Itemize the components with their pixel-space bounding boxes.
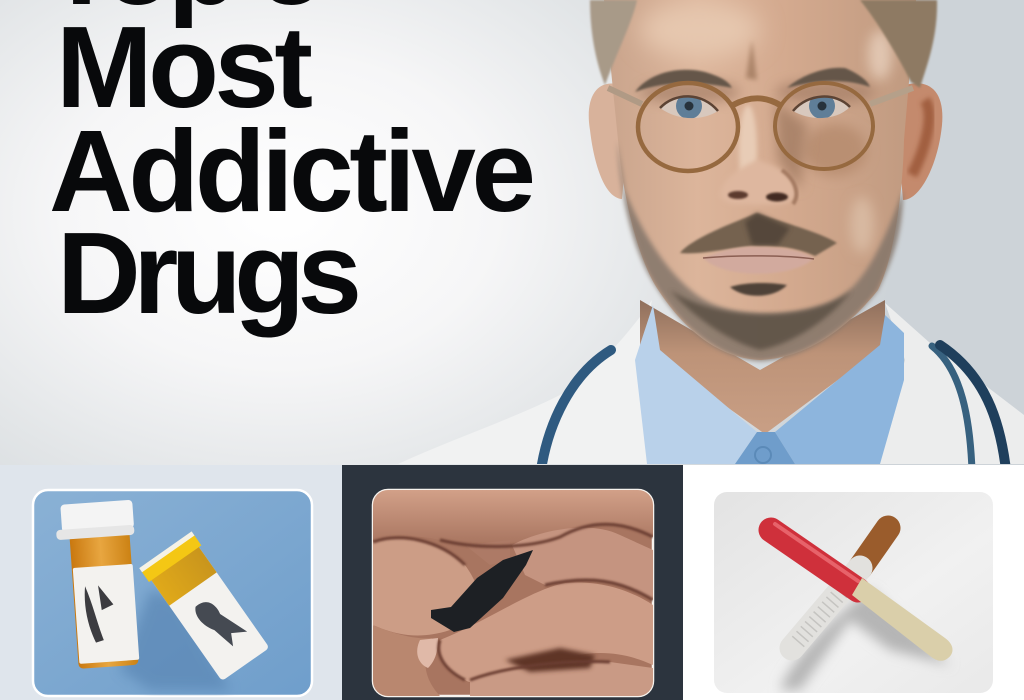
ear right (897, 83, 942, 200)
ear left (588, 84, 624, 199)
title (46, 0, 536, 338)
eyebrows (635, 68, 870, 92)
nose (720, 160, 797, 205)
face (604, 0, 916, 360)
hair (590, 0, 937, 88)
title: Most (56, 2, 313, 132)
neck (640, 300, 885, 434)
icon: cigarette (792, 528, 888, 648)
facial shading (640, 2, 892, 253)
lab coat (398, 300, 1024, 464)
photo card (714, 492, 993, 693)
panel: red stick and cigarette (714, 492, 993, 693)
doctor portrait (398, 0, 1024, 470)
icon: red and beige capsule (771, 524, 952, 661)
panel: prescription bottles (0, 465, 342, 700)
fingers (373, 490, 653, 696)
mouth (703, 247, 814, 274)
stethoscope (541, 345, 1006, 470)
hero background (0, 0, 1024, 465)
panel: hands with black patch (342, 465, 683, 700)
title: Addictive (49, 106, 536, 236)
shirt collar (635, 305, 904, 464)
glasses (608, 83, 913, 171)
photo card (373, 490, 653, 696)
beard (617, 140, 903, 361)
icon: yellow bottle (139, 531, 272, 683)
title: Drugs (57, 208, 362, 338)
eyes (660, 93, 850, 119)
photo card (33, 490, 312, 696)
icon: orange bottle (54, 500, 144, 670)
black patch (431, 550, 533, 632)
